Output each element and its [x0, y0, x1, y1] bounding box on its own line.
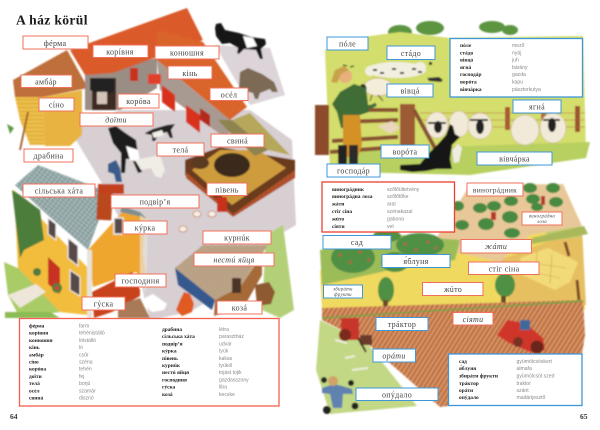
label: вівця: вівцá: [400, 86, 420, 96]
label: жати: [461, 240, 532, 253]
glossary: vineyard and fields: szénakazal: [387, 209, 412, 215]
meadow: [325, 32, 586, 172]
glossary: pasture: nyáj: [512, 50, 521, 56]
glossary: vineyard and fields: виногрáдник: [332, 187, 365, 193]
glossary: farm: kecske: [219, 392, 235, 398]
glossary: orchard and ploughing: орáти: [459, 388, 473, 394]
glossary: pasture: kapu: [512, 80, 523, 86]
hedge: [388, 21, 518, 39]
label: півень: [207, 183, 247, 196]
label: кінь: кінь: [182, 69, 198, 78]
glossary: farm: драбина: [162, 326, 182, 333]
label: трактор: трáктор: [388, 320, 416, 329]
glossary: farm: borjú: [79, 381, 90, 387]
gate: [330, 110, 398, 152]
label: сільська хата: сільська хáта: [35, 186, 83, 196]
glossary: farm: корóва: [29, 367, 46, 373]
label: конюшня: [155, 46, 219, 59]
label: сільська хата: [23, 184, 95, 197]
label: коза: козá: [232, 304, 247, 312]
glossary: farm: кінь: [29, 345, 40, 351]
label: сіяти: [453, 312, 493, 325]
label: доїти: доїти: [105, 116, 127, 124]
glossary: orchard and ploughing: [448, 354, 582, 406]
glossary: farm: амбáр: [29, 351, 44, 358]
glossary: orchard and ploughing: опýдало: [459, 395, 479, 401]
label: осел: осéл: [221, 90, 237, 100]
glossary: farm: кýрка: [162, 349, 177, 355]
glossary: pasture: вівцá: [460, 58, 473, 64]
glossary: farm: нестú яйця: [162, 369, 189, 376]
sheepdog: [400, 124, 460, 172]
orchard: [320, 235, 460, 285]
glossary: farm: подвір’я: [162, 341, 183, 347]
label: сад: [323, 236, 391, 249]
glossary: pasture: mező: [512, 43, 525, 49]
glossary: vineyard and fields: стіг сіна: [332, 209, 352, 215]
label: амбар: амбáр: [35, 78, 57, 86]
glossary: farm: fej: [79, 374, 84, 380]
glossary: farm: farm: [79, 324, 89, 330]
label: корівня: корíвня: [106, 48, 134, 56]
glossary: vineyard and fields: сіяти: [332, 224, 345, 230]
label: стіг сіна: стіг сіна: [489, 264, 520, 274]
glossary: farm: udvar: [219, 341, 232, 347]
glossary: pasture: пóле: [460, 43, 472, 49]
glossary: farm: tojást tojik: [219, 370, 242, 376]
glossary: farm: gazdasszony: [219, 377, 249, 383]
vineyard soil: [435, 184, 582, 262]
glossary: farm: конюшня: [29, 338, 53, 344]
label: теля: [157, 143, 204, 156]
label: виноградна лоза: виногрáдна: [529, 215, 555, 220]
illustration: farmyard: [4, 8, 296, 320]
glossary: orchard and ploughing: traktor: [516, 381, 531, 387]
label: кінь: [168, 66, 212, 79]
label: сіно: [39, 98, 74, 111]
label: курник: [203, 231, 271, 244]
glossary: farm: liba: [219, 385, 227, 391]
label: вівчарка: вівчáрка: [499, 154, 530, 164]
label: господиня: [115, 274, 166, 287]
yard ground: [70, 110, 296, 320]
label: стадо: [387, 46, 435, 60]
label: курник: курнúк: [224, 234, 250, 242]
label: ферма: фéрма: [44, 39, 66, 48]
label: виноградна лоза: лоза: [536, 220, 547, 225]
label: гуска: гýска: [94, 300, 113, 308]
stable roofs: [70, 8, 203, 75]
page number 65: 65: [580, 412, 588, 421]
glossary: farm: півень: [162, 356, 178, 362]
glossary: vineyard and fields: жúто: [332, 216, 344, 222]
sheep behind the fence: [426, 111, 566, 145]
glossary: pasture: вівчáрка: [460, 87, 482, 93]
glossary: pasture: ворóта: [460, 80, 477, 86]
label: сад: сад: [351, 238, 363, 247]
stable walls: [85, 58, 157, 110]
glossary: farm: телá: [29, 381, 40, 387]
label: виноградна лоза: [522, 212, 562, 225]
label: подвір'я: [111, 195, 199, 208]
glossary: pasture: стáдо: [460, 50, 473, 56]
farmer: [332, 84, 369, 130]
glossary: vineyard and fields: szőlőtőke: [387, 194, 409, 200]
label: жати: жáти: [485, 242, 507, 251]
glossary: orchard and ploughing: gyümölcsöt szed: [516, 374, 555, 380]
label: жито: жúто: [443, 285, 462, 294]
label: свиня: [211, 134, 264, 147]
label: курка: кýрка: [135, 224, 156, 232]
label: осел: [210, 88, 248, 100]
running sheep: [364, 78, 392, 96]
label: поле: пóле: [339, 40, 356, 48]
harvest field: [320, 225, 585, 312]
label: стадо: стáдо: [401, 49, 421, 58]
glossary: farm: szamár: [79, 388, 96, 394]
label: конюшня: конюшня: [170, 48, 204, 58]
label: корова: [118, 94, 159, 108]
label: господиня: господиня: [122, 276, 159, 286]
glossary: farm: csűr: [79, 352, 89, 358]
label: свиня: свинá: [227, 136, 248, 146]
glossary: orchard and ploughing: сад: [459, 359, 467, 365]
path stones and geese: [118, 298, 150, 318]
glossary: vineyard and fields: виногрáдна лоза: [332, 194, 373, 200]
left tractor: [341, 318, 359, 340]
label: доїти: [80, 113, 153, 126]
glossary: pasture: bárány: [512, 65, 528, 71]
house: [14, 190, 88, 315]
label: виноградник: [467, 183, 523, 196]
glossary: farm: господиня: [162, 377, 187, 383]
glossary: orchard and ploughing: gyümölcsöskert: [516, 359, 552, 365]
label: ворота: ворóта: [393, 148, 417, 156]
glossary: farm: доїти: [29, 374, 42, 380]
glossary: farm: széna: [79, 360, 93, 366]
glossary: pasture: господáр: [460, 72, 481, 78]
label: жито: [422, 282, 483, 296]
glossary: farm: фéрма: [29, 322, 45, 330]
label: збирати фрукти: фрукти: [334, 293, 352, 298]
glossary: farm: ló: [79, 345, 83, 351]
glossary: farm: parasztház: [219, 334, 244, 340]
illustration: sheep pasture: [315, 21, 590, 175]
label: опудало: опýдало: [382, 390, 412, 400]
glossary: farm: [20, 318, 279, 406]
ploughed field: [322, 300, 585, 407]
page number 64: 64: [10, 412, 18, 421]
label: ягня: ягнá: [529, 102, 545, 112]
glossary: vineyard and fields: arat: [387, 202, 396, 208]
label: збирати фрукти: збирáти: [332, 288, 353, 293]
glossary: orchard and ploughing: я́блуня: [459, 364, 476, 372]
label: драбина: драбина: [34, 152, 64, 160]
glossary: farm: корíвня: [29, 331, 48, 337]
label: нести яйця: нестú яйця: [213, 256, 255, 264]
glossary: pasture: [450, 38, 582, 97]
label: драбина: [24, 149, 73, 162]
title: A ház körül: [16, 12, 88, 28]
label: гуска: [82, 297, 125, 310]
glossary: farm: свинá: [29, 396, 44, 402]
glossary: farm: осéл: [29, 388, 40, 394]
pig sty: [185, 147, 295, 215]
label: орати: орáти: [382, 352, 406, 360]
glossary: orchard and ploughing: трáктор: [459, 381, 479, 387]
glossary: pasture: ягнá: [460, 65, 471, 71]
label: теля: телá: [173, 146, 189, 154]
right tractor: [497, 320, 545, 353]
label: трактор: [376, 318, 428, 330]
label: господар: [327, 164, 380, 177]
label: коза: [217, 301, 262, 314]
glossary: vineyard and fields: vet: [387, 224, 394, 230]
glossary: vineyard and fields: жáти: [332, 202, 344, 208]
glossary: farm: lóistálló: [79, 338, 96, 344]
label: сіяти: сіяти: [463, 315, 483, 324]
label: виноградник: виногрáдник: [473, 186, 517, 194]
glossary: farm: козá: [162, 392, 173, 398]
label: яблуня: [382, 254, 450, 268]
glossary: pasture: gazda: [512, 72, 526, 78]
label: стіг сіна: [468, 262, 539, 274]
glossary: farm: disznó: [79, 396, 94, 402]
illustration: fields: [316, 183, 588, 414]
label: господар: господáр: [337, 166, 370, 176]
label: сіно: сíно: [49, 100, 64, 110]
label: корівня: [93, 45, 148, 58]
label: амбар: [21, 75, 72, 88]
label: збирати фрукти: [324, 285, 362, 298]
fence: [505, 107, 510, 130]
glossary: farm: tehén: [79, 367, 92, 373]
field hedge: [530, 190, 582, 240]
glossary: orchard and ploughing: збирáти фрукти: [459, 372, 498, 380]
glossary: orchard and ploughing: szánt: [516, 388, 529, 394]
label: яблуня: я́блуня: [403, 256, 429, 266]
glossary: farm: гýска: [162, 385, 176, 391]
glossary: farm: курнúк: [162, 363, 181, 369]
glossary: farm: tyúk: [219, 349, 229, 355]
label: корова: корóва: [126, 97, 151, 106]
glossary: farm: сільська хáта: [162, 334, 195, 340]
scarecrow: [322, 384, 353, 408]
glossary: farm: сіно: [29, 360, 39, 366]
flock: [366, 62, 426, 78]
glossary: orchard and ploughing: almafa: [516, 366, 532, 372]
glossary: farm: tyúkól: [219, 363, 232, 369]
label: поле: [327, 37, 368, 50]
glossary: vineyard and fields: gabona: [387, 216, 404, 222]
cows on top right: [215, 23, 266, 59]
label: нести яйця: [194, 253, 274, 266]
grass: [262, 225, 294, 318]
label: півень: півень: [215, 186, 239, 194]
lower-left grass: [316, 320, 417, 414]
label: ворота: [381, 145, 429, 158]
glossary: orchard and ploughing: madárijesztő: [516, 395, 546, 401]
hen house: [175, 245, 268, 300]
glossary: vineyard and fields: szőlőültetvény: [387, 187, 420, 193]
label: курка: [123, 221, 167, 234]
thatched barn: [13, 50, 88, 97]
geese in the yard: [179, 211, 216, 232]
glossary: farm: létra: [219, 327, 229, 333]
yard cows: [108, 126, 142, 173]
label: вівця: [387, 84, 433, 97]
glossary: pasture: pásztorkutya: [512, 87, 541, 93]
glossary: farm: kakas: [219, 356, 233, 362]
label: орати: [373, 349, 416, 362]
label: ягня: [513, 100, 561, 113]
glossary: pasture: juh: [511, 58, 519, 64]
glossary: farm: tehénistálló: [79, 331, 105, 337]
label: опудало: [356, 388, 438, 400]
haystack: [520, 248, 578, 290]
label: подвір'я: подвір’я: [140, 198, 170, 206]
label: ферма: [23, 36, 88, 49]
label: вівчарка: [477, 152, 552, 165]
glossary: vineyard and fields: [322, 182, 454, 232]
